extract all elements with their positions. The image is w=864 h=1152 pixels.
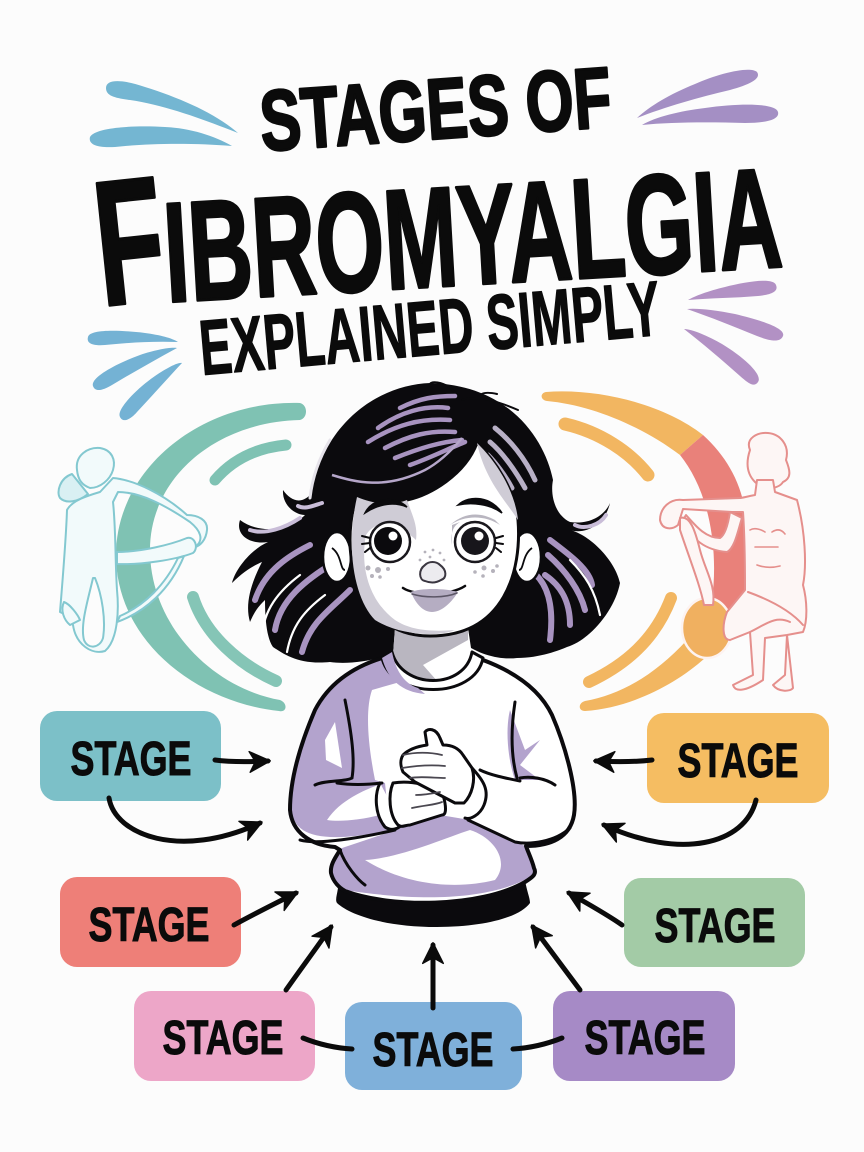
stage box: purple: STAGE	[584, 1012, 706, 1065]
waistband	[336, 880, 530, 927]
stage box: pink: STAGE	[162, 1012, 284, 1065]
right colored arc	[542, 391, 749, 711]
stage box: coral	[60, 877, 241, 967]
stage box: orange	[647, 713, 829, 803]
title: F	[85, 139, 174, 344]
decorative title swooshes: lower left	[88, 331, 182, 420]
title: STAGES OF	[257, 50, 614, 170]
stage box: blue: STAGE	[372, 1024, 494, 1077]
stage box: blue	[345, 1002, 522, 1090]
girl illustration	[232, 382, 620, 927]
neck	[392, 628, 474, 684]
back hair	[232, 383, 620, 663]
title	[85, 50, 786, 392]
stage box: green: STAGE	[654, 900, 776, 953]
decorative title swooshes: lower right	[684, 281, 783, 385]
stage box: purple	[553, 991, 735, 1081]
stage box: pink	[134, 991, 315, 1081]
hair highlights	[250, 382, 606, 652]
arrows	[109, 760, 756, 1049]
nose and mouth	[403, 562, 465, 612]
decorative title swooshes: top left	[90, 81, 238, 147]
face	[350, 443, 519, 636]
left colored arc	[116, 403, 306, 711]
stage box: orange: STAGE	[678, 735, 798, 788]
stage box: green	[624, 878, 805, 967]
stage box: coral: STAGE	[88, 899, 210, 952]
stage box: teal: STAGE	[70, 733, 192, 786]
freckles	[366, 549, 499, 579]
eyes	[362, 498, 503, 562]
stage box: teal	[40, 711, 221, 801]
hands	[337, 730, 520, 829]
decorative title swooshes: top right	[637, 70, 778, 125]
right figure: coral outline person	[660, 433, 806, 691]
left figure: teal outline person	[58, 448, 207, 652]
sweater	[290, 652, 575, 903]
ears	[323, 532, 541, 582]
